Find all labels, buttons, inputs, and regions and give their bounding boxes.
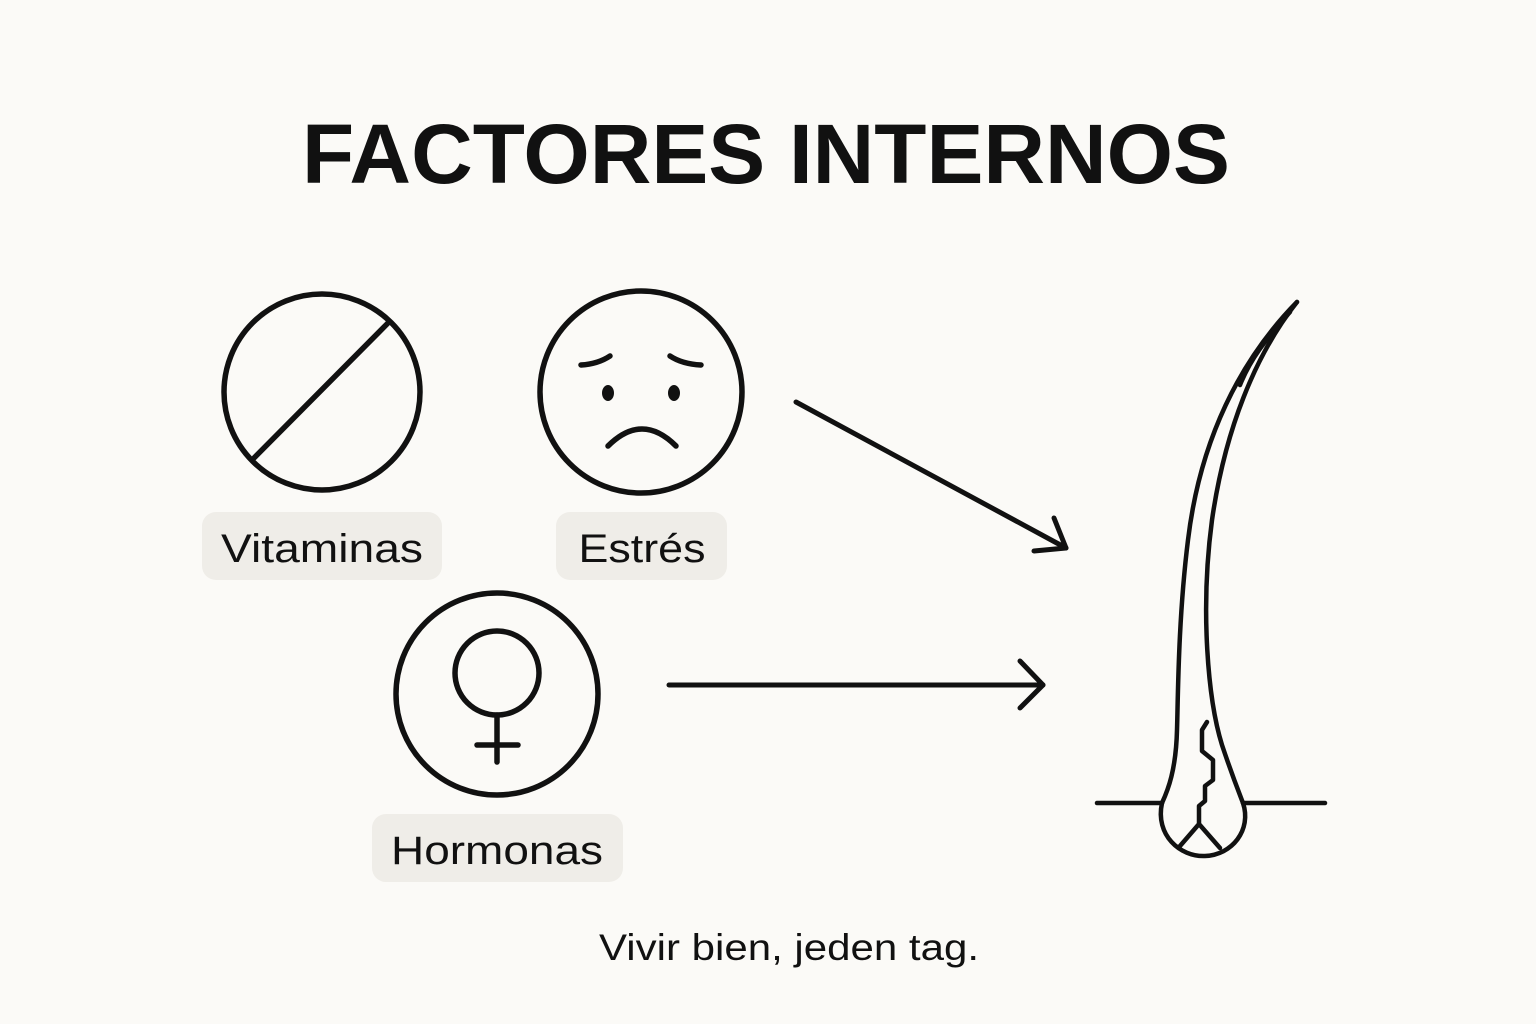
label: Estrés: Estrés bbox=[578, 527, 706, 571]
label: Hormonas: Hormonas bbox=[391, 829, 603, 873]
illustration: hair follicle bbox=[1097, 302, 1325, 856]
icon: stress face bbox=[540, 291, 742, 493]
label: Estrés bbox=[556, 512, 727, 580]
title: FACTORES INTERNOS bbox=[302, 107, 1230, 201]
icon: vitamins (crossed circle) bbox=[224, 294, 420, 490]
icon: hormones (female symbol) bbox=[396, 593, 598, 795]
label: Hormonas bbox=[372, 814, 623, 882]
label: Vitaminas: Vitaminas bbox=[221, 527, 423, 571]
arrow: horizontal to hair bbox=[669, 661, 1043, 708]
label: Vitaminas bbox=[202, 512, 442, 580]
arrow: diagonal to hair bbox=[796, 402, 1066, 551]
footer tagline: Vivir bien, jeden tag. bbox=[599, 927, 979, 968]
